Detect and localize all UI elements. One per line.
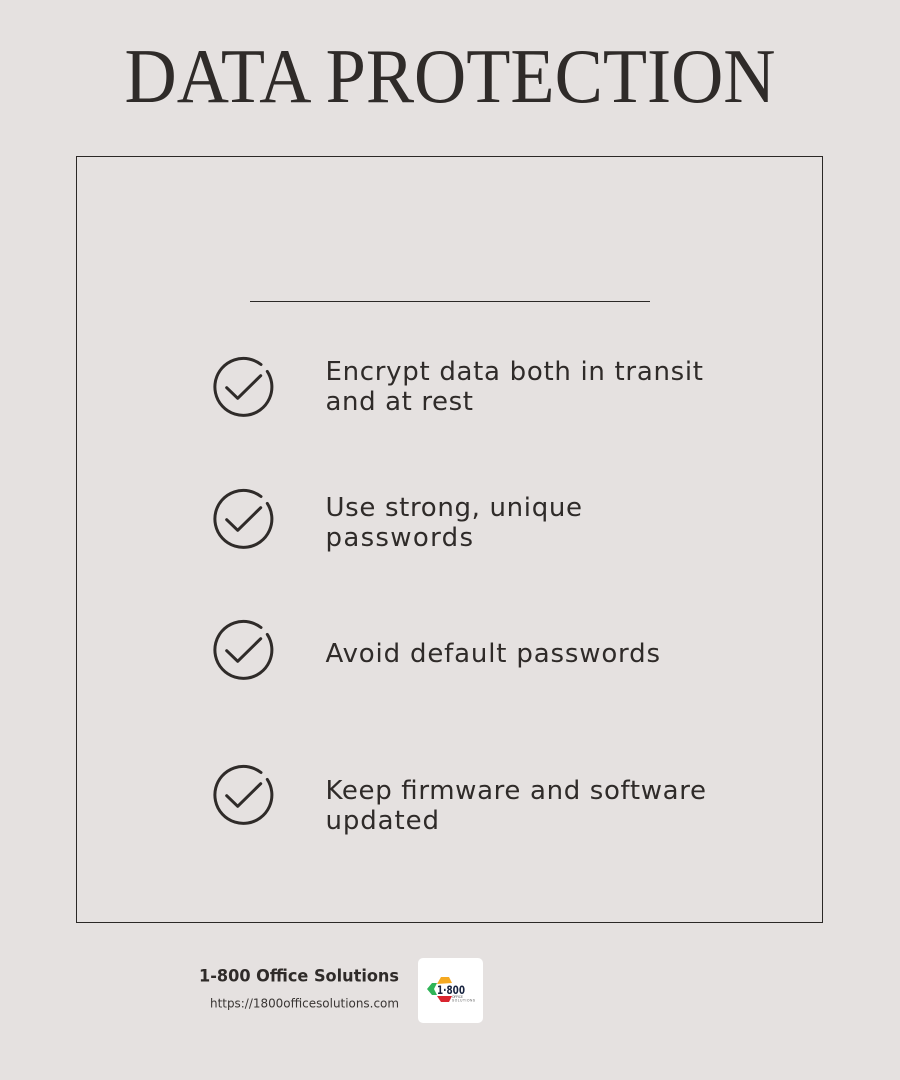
- text: strong passwords: passwords: [326, 523, 473, 553]
- item: encrypt data: [215, 357, 703, 417]
- footer: url: https://1800officesolutions.com: [210, 996, 399, 1010]
- icon: check circle: [215, 766, 272, 823]
- icon: check circle: [215, 621, 272, 678]
- footer: logo: [418, 958, 483, 1023]
- text: firmware updates: updated: [326, 806, 439, 836]
- item: default passwords: [215, 621, 660, 678]
- item: firmware updates: [215, 766, 706, 836]
- footer: logo: SOLUTIONS: [452, 998, 475, 1002]
- icon: check circle: [215, 490, 272, 547]
- panel: checklist: [76, 156, 822, 922]
- icon: check circle: [215, 358, 272, 415]
- footer: logo: OFFICE: [452, 995, 463, 999]
- footer: logo: 1·800: [437, 983, 465, 997]
- footer: brand name: 1-800 Office Solutions: [199, 966, 399, 986]
- text: encrypt data: Encrypt data both in transit: [326, 357, 703, 387]
- text: encrypt data: and at rest: [326, 387, 473, 417]
- text: strong passwords: Use strong, unique: [326, 493, 582, 523]
- text: firmware updates: Keep firmware and software: [326, 776, 706, 806]
- item: strong passwords: [215, 490, 582, 553]
- text: default passwords: Avoid default passwords: [326, 639, 660, 669]
- title: DATA PROTECTION: [124, 33, 776, 119]
